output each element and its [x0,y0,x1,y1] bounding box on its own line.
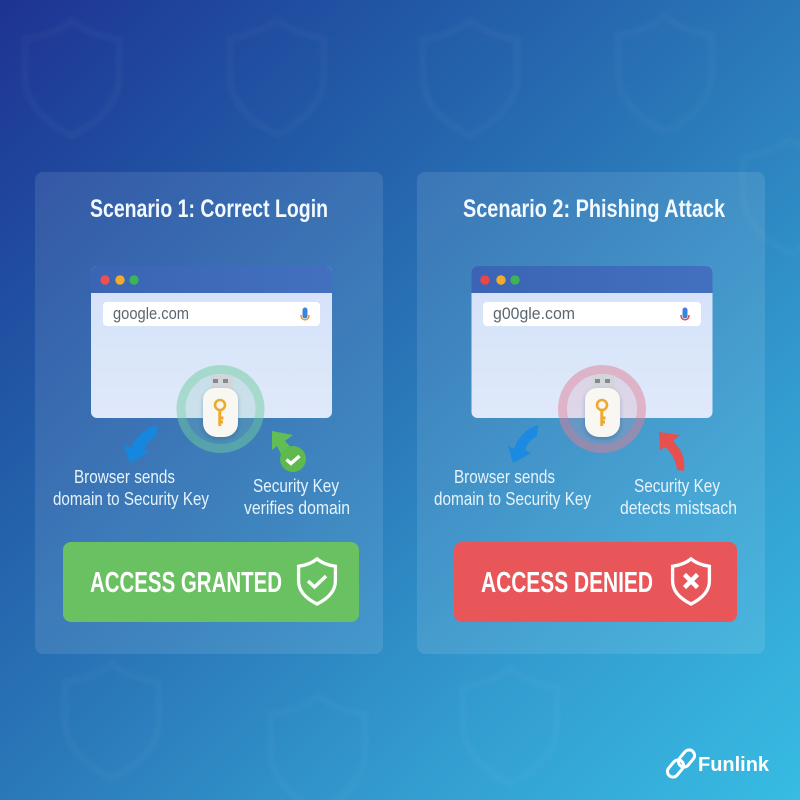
arrow: key to browser (green) with check badge [272,431,306,472]
panel: scenario 2 [417,172,765,654]
browser window: google.com [91,266,332,418]
label: key verifies: Security Key [253,475,340,496]
label: browser sends: domain to Security Key [434,488,592,509]
label: browser sends: Browser sends [74,466,175,487]
logo: Funlink: Funlink [698,754,770,776]
banner: access granted [63,542,359,622]
label: browser sends: domain to Security Key [53,488,210,509]
label: key verifies: verifies domain [244,497,350,518]
panel: scenario 1 [35,172,383,654]
logo: Funlink [665,748,770,779]
browser window: g00gle.com: g00gle.com [493,305,575,323]
browser window: g00gle.com [472,266,712,418]
label: key detects mismatch: Security Key [634,475,721,496]
security key with red ring [562,370,642,448]
label: key detects mismatch [620,475,737,518]
heading: scenario 1: Scenario 1: Correct Login [90,195,328,223]
label: browser sends: Browser sends [454,466,555,487]
label: key verifies [244,475,350,518]
label: browser sends [53,466,210,509]
banner: access denied: ACCESS DENIED [481,567,653,599]
banner: access granted: ACCESS GRANTED [90,567,282,599]
banner: access denied [454,542,737,622]
label: key detects mismatch: detects mistsach [620,497,737,518]
arrow: browser to key (blue) [124,425,157,463]
browser window: google.com: google.com [113,305,189,323]
arrow: browser to key (blue) [508,425,538,463]
security key with green ring [181,370,260,448]
arrow: key to browser (red) [659,432,684,471]
label: browser sends [434,466,592,509]
heading: scenario 2: Scenario 2: Phishing Attack [463,195,725,223]
